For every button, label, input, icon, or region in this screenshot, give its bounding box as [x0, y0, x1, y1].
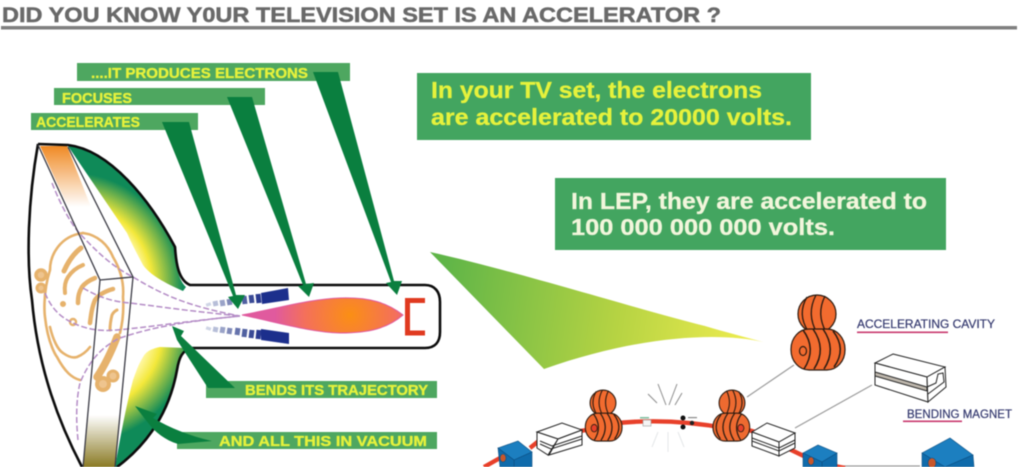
callout: LEP: 100 000 000 000 volts. — [571, 214, 835, 240]
blue quadrupole: right — [803, 445, 837, 467]
olive screen strip — [83, 415, 120, 467]
callout: tv set: In your TV set, the electrons — [431, 77, 762, 103]
collision rays — [648, 384, 682, 405]
title: DID YOU KNOW Y0UR TELEVISION SET IS AN ACCELERATOR ? — [2, 4, 721, 27]
zoom cone — [430, 252, 763, 369]
orange screen strip — [40, 146, 91, 207]
accelerating cavity detail — [791, 295, 845, 370]
quadrupole detail — [922, 438, 974, 467]
arrow: vacuum — [135, 406, 212, 444]
electron plume — [242, 298, 403, 333]
callout: LEP — [555, 178, 946, 250]
label: bends its trajectory: BENDS ITS TRAJECTORY — [245, 382, 428, 399]
lower green bulb shading — [115, 347, 186, 467]
label: bending magnet: BENDING MAGNET — [907, 409, 1012, 421]
callout: LEP: In LEP, they are accelerated to — [571, 188, 927, 214]
upper green bulb shading — [68, 146, 186, 291]
tube outline — [29, 144, 440, 467]
title rule — [1, 26, 1017, 30]
callout: tv set — [417, 73, 811, 140]
label: focuses — [54, 88, 265, 107]
label: accelerates: ACCELERATES — [36, 114, 140, 131]
red beam pipe — [484, 421, 845, 467]
label: and all this in vacuum — [177, 432, 437, 450]
small cavity: left — [585, 390, 622, 441]
label: and all this in vacuum: AND ALL THIS IN VACUUM — [219, 433, 427, 450]
collision rays below — [652, 432, 684, 452]
electron paths, dashed — [45, 183, 240, 440]
small bending magnet: left — [537, 423, 582, 455]
upper focusing coil — [208, 288, 289, 306]
diagram: LEP ring — [484, 295, 1012, 467]
screen edge lines — [38, 145, 133, 467]
label: accelerating cavity: ACCELERATING CAVITY — [857, 319, 995, 331]
arrow: bends its trajectory — [172, 326, 235, 388]
detector marks — [640, 416, 697, 430]
swirl pattern on screen — [36, 233, 123, 390]
arrow: focuses — [227, 97, 314, 297]
blue quadrupole: left — [498, 441, 532, 467]
small cavity: right — [713, 390, 750, 441]
label: focuses: FOCUSES — [62, 90, 132, 107]
lower focusing coil — [208, 327, 289, 344]
leader lines — [747, 365, 920, 466]
label: produces electrons: ....IT PRODUCES ELECTRONS — [91, 65, 308, 82]
arrow: produces electrons — [313, 72, 402, 295]
arrow: accelerates — [162, 122, 245, 309]
panel: television tube — [29, 144, 440, 467]
bending magnet detail — [875, 354, 946, 402]
callout: tv set: are accelerated to 20000 volts. — [431, 104, 792, 130]
small bending magnet: right — [752, 423, 795, 456]
label: accelerates — [31, 113, 198, 131]
red electron gun — [408, 300, 425, 333]
